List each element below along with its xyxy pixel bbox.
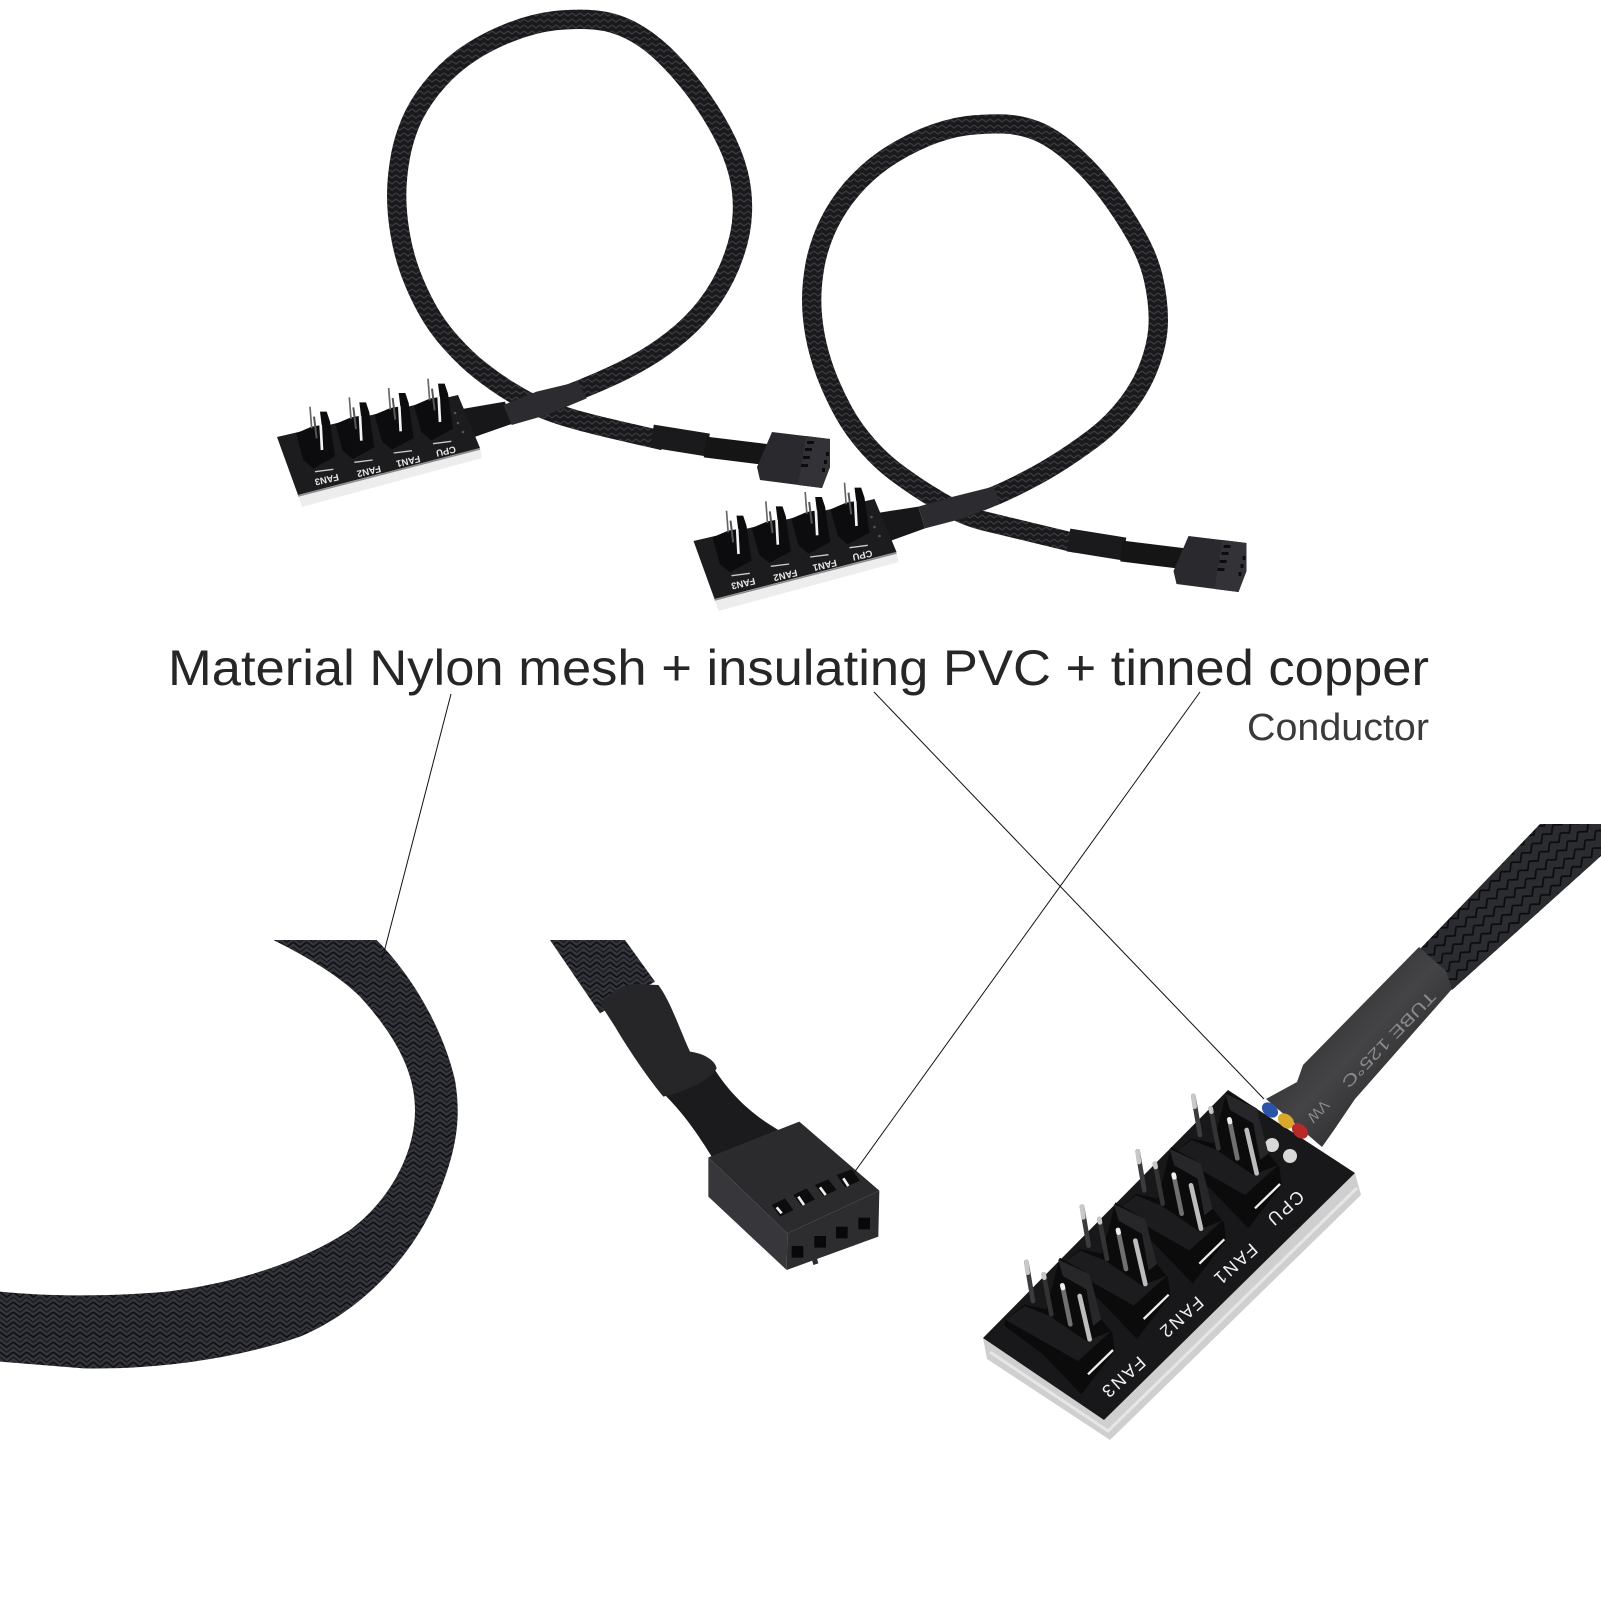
large header FAN3 bbox=[1005, 1258, 1115, 1394]
large board labels bbox=[1097, 1186, 1308, 1403]
splitter board one bbox=[277, 379, 482, 507]
board labels two: FAN1 bbox=[811, 557, 838, 573]
centre heat shrink sleeve bbox=[503, 382, 587, 425]
header CPU two bbox=[830, 483, 869, 548]
detail: braided nylon mesh bbox=[0, 940, 458, 1369]
board labels two: FAN3 bbox=[730, 575, 756, 591]
centre heat shrink sleeve two bbox=[918, 487, 1000, 528]
large board labels: CPU bbox=[1262, 1186, 1308, 1231]
large board labels: FAN2 bbox=[1155, 1292, 1207, 1343]
four pin female connector bbox=[757, 432, 830, 488]
four pin female connector two bbox=[1174, 536, 1246, 592]
header FAN1 bbox=[375, 388, 414, 453]
detail: four pin connector bbox=[550, 940, 879, 1270]
connector braid bbox=[550, 940, 655, 1013]
silver adhesive base bbox=[983, 1173, 1361, 1440]
board heat shrink tube bbox=[1266, 947, 1452, 1147]
upper pin slots bbox=[772, 1169, 860, 1217]
leader line: nylon mesh bbox=[382, 694, 451, 960]
short lead from board two bbox=[875, 507, 925, 542]
heat shrink near connector two bbox=[1068, 540, 1124, 549]
detail: splitter board close-up bbox=[983, 824, 1601, 1440]
headers two bbox=[712, 483, 869, 576]
board labels: FAN1 bbox=[394, 453, 421, 469]
subheading: conductor: Conductor bbox=[1247, 707, 1429, 749]
large header CPU bbox=[1172, 1092, 1282, 1228]
tube printing: TUBE 125°C bbox=[1338, 987, 1438, 1090]
large board labels: FAN1 bbox=[1209, 1239, 1261, 1290]
header FAN1 two bbox=[791, 492, 830, 557]
headers bbox=[296, 379, 453, 472]
thin lead to connector bbox=[705, 447, 770, 455]
coloured wires bbox=[1259, 1099, 1311, 1142]
cable one bbox=[277, 19, 830, 507]
lower square holes bbox=[792, 1218, 870, 1258]
heading: material: Material Nylon mesh + insulating PVC + tinned copper bbox=[168, 640, 1429, 696]
splitter board two bbox=[694, 483, 898, 611]
large header FAN2 bbox=[1060, 1202, 1170, 1339]
thin lead to connector two bbox=[1122, 551, 1186, 559]
short lead from board bbox=[460, 402, 512, 437]
pin highlights bbox=[777, 1178, 848, 1213]
leader line: insulating PVC bbox=[874, 692, 1264, 1099]
board labels: CPU bbox=[435, 443, 457, 458]
board cable braid bbox=[1419, 824, 1601, 990]
tube printing end: VW bbox=[1303, 1096, 1332, 1126]
connector heat shrink bbox=[600, 984, 717, 1097]
header CPU bbox=[414, 379, 453, 444]
connector thin lead bbox=[663, 1070, 778, 1157]
large header FAN1 bbox=[1116, 1147, 1226, 1284]
header FAN2 two bbox=[752, 501, 791, 566]
black board bbox=[983, 1090, 1355, 1420]
connector housing bbox=[708, 1122, 879, 1270]
cable two bbox=[694, 124, 1246, 611]
header FAN3 bbox=[296, 407, 335, 472]
board labels bbox=[313, 443, 457, 487]
solder pads bbox=[1265, 1138, 1297, 1163]
heat shrink near connector bbox=[652, 436, 708, 445]
product photo: two splitter cables bbox=[277, 19, 1246, 611]
large board labels: FAN3 bbox=[1097, 1352, 1149, 1403]
large headers bbox=[1005, 1092, 1282, 1394]
board labels: FAN3 bbox=[313, 471, 340, 487]
board labels two: FAN2 bbox=[772, 567, 798, 583]
braided loop two bbox=[812, 124, 1158, 543]
header FAN3 two bbox=[712, 511, 751, 576]
board labels two bbox=[730, 547, 873, 591]
board labels: FAN2 bbox=[356, 463, 382, 479]
braided loop one bbox=[397, 19, 742, 441]
board labels two: CPU bbox=[851, 547, 873, 562]
header FAN2 bbox=[335, 397, 374, 462]
leader line: tinned copper bbox=[851, 692, 1200, 1177]
